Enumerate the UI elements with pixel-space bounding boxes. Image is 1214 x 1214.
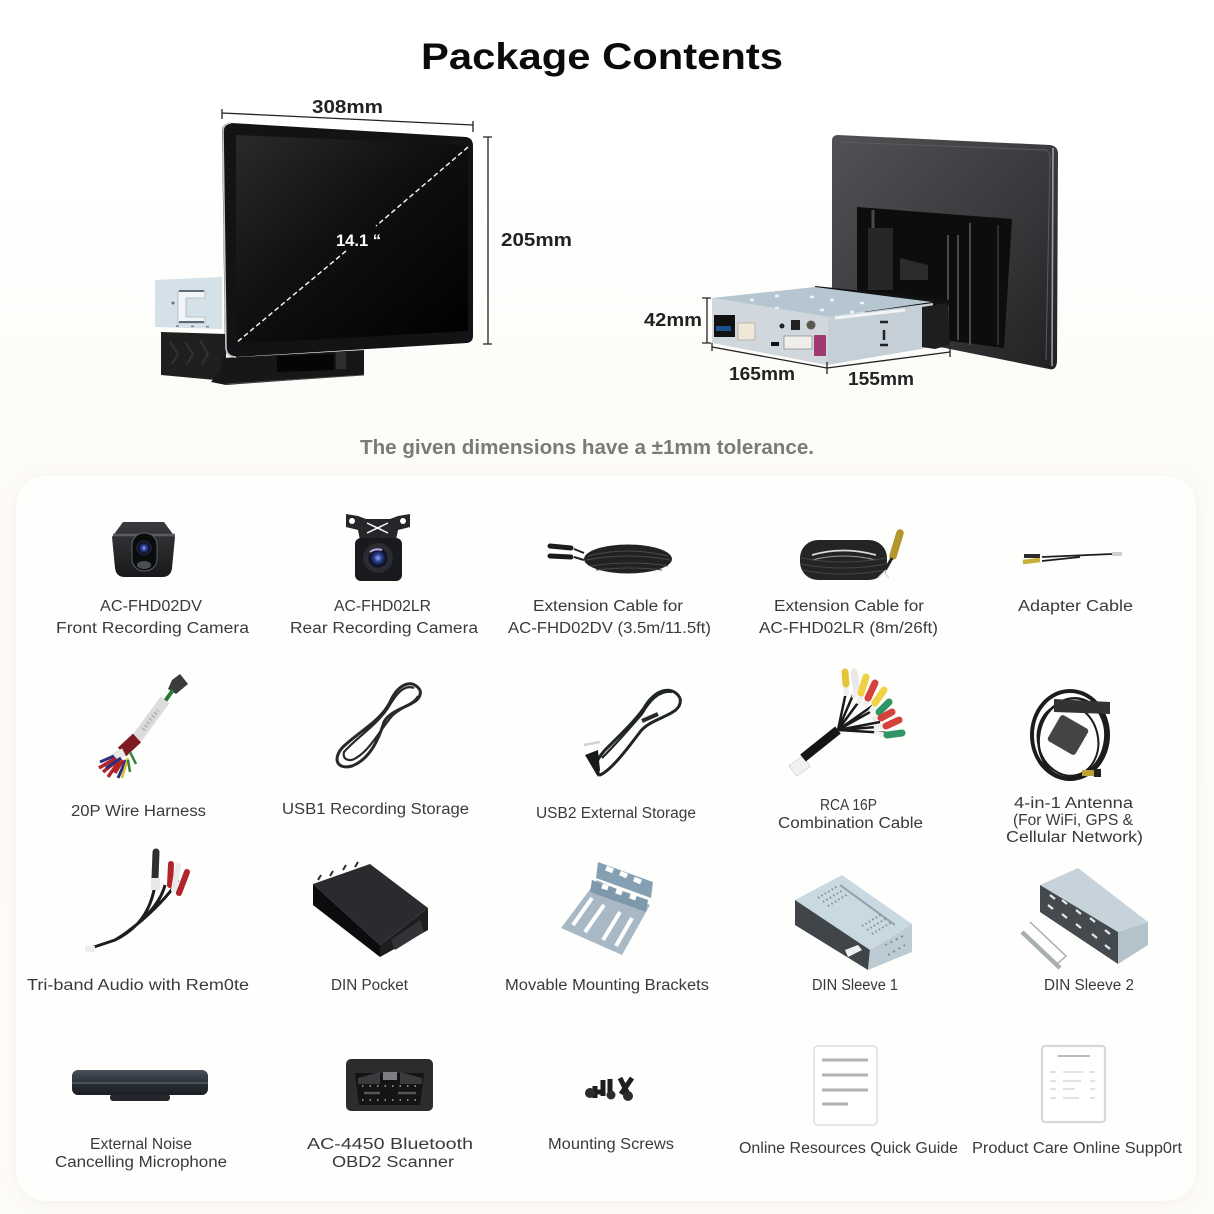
dimension: height 205mm [483,137,572,344]
item: USB2: USB2 External Storage [536,805,696,822]
title: Package Contents [421,36,783,77]
panel shadow [16,478,1196,1202]
dimension: width 308mm: 308mm [312,96,383,117]
icon: adapter cable [1023,552,1122,562]
item: adapter cable: Adapter Cable [1018,598,1133,615]
icon: microphone [72,1070,208,1101]
item: rear camera [290,514,478,637]
screen body [222,123,473,357]
icon: care card [1042,1046,1105,1122]
item: extension cable rear: Extension Cable for [774,598,924,615]
item: rear camera: Rear Recording Camera [290,620,478,637]
rear view of head unit [712,135,1058,369]
tolerance note: The given dimensions have a ±1mm tolerance. [360,437,814,459]
side bracket [922,303,950,349]
dimension: 165mm: 165mm [729,363,795,384]
item: extension cable rear [759,533,938,637]
screen size label: 14.1 “ [336,231,381,250]
item: microphone: External Noise [90,1136,192,1153]
screen edge highlight [223,123,236,357]
item: microphone: Cancelling Microphone [55,1154,227,1171]
item: antenna: Cellular Network) [1006,829,1143,846]
item: USB1: USB1 Recording Storage [282,801,469,818]
connectors [714,310,905,356]
icon: USB cable [337,684,420,767]
item: adapter cable [1018,552,1133,615]
icon: OBD2 scanner [346,1059,433,1111]
rear panel edge [1052,148,1053,366]
item: front camera: AC-FHD02DV [100,598,203,615]
item: front camera [56,522,249,637]
item: antenna: 4-in-1 Antenna [1014,795,1133,812]
panel: contents [16,476,1196,1201]
icon: cable coil [550,544,672,574]
icon: cable coil with yellow plug [800,533,900,580]
icon: RCA bundle [789,672,902,776]
icon: sleeve 2 [1022,868,1148,968]
item: front camera: Front Recording Camera [56,620,249,637]
item: screws: Mounting Screws [548,1136,674,1153]
item: tri-band audio [27,852,249,994]
item: tri-band audio: Tri-band Audio with Rem0te [27,977,249,994]
dimension: 165mm [712,343,827,384]
icon: audio cable [85,852,187,952]
item: DIN sleeve 1: DIN Sleeve 1 [812,977,898,994]
item: extension cable front [508,544,711,637]
icon: front camera [112,522,175,577]
metal box connector side [712,298,828,365]
item: DIN sleeve 2: DIN Sleeve 2 [1044,977,1134,994]
item: DIN sleeve 1 [795,875,912,994]
item: OBD2 scanner [307,1059,473,1171]
item: rear camera: AC-FHD02LR [334,598,431,615]
item: screws [548,1078,674,1153]
item: extension cable front: Extension Cable for [533,598,683,615]
item: DIN sleeve 2 [1022,868,1148,994]
item: extension cable rear: AC-FHD02LR (8m/26ft) [759,620,938,637]
metal box top [712,287,932,317]
item: extension cable front: AC-FHD02DV (3.5m/11.5ft) [508,620,711,637]
icon: screws [585,1078,633,1101]
item: online support: Product Care Online Supp0rt [972,1140,1183,1157]
icon: rear camera [346,514,410,581]
item: microphone [55,1070,227,1171]
front view of head unit [155,123,473,385]
dimension: 42mm height [644,298,711,343]
rear panel bevel [840,142,1050,360]
item: USB1 [282,684,469,818]
item: USB2 [536,690,696,822]
item: wire harness [71,674,206,820]
item: quick guide [739,1046,958,1157]
mounting bracket [815,207,1012,348]
item: mounting brackets: Movable Mounting Brackets [505,977,709,994]
item: OBD2 scanner: AC-4450 Bluetooth [307,1136,473,1153]
metal box right side [827,303,933,365]
icon: sleeve 1 [795,875,912,970]
icon: antenna [1030,691,1113,784]
item: antenna [1006,691,1143,846]
item: antenna: (For WiFi, GPS & [1013,812,1134,829]
dimension: 155mm: 155mm [848,368,914,389]
item: RCA cable: RCA 16P [820,797,877,814]
item: quick guide: Online Resources Quick Guide [739,1140,958,1157]
rear panel [832,135,1058,369]
icon: brackets [561,862,653,955]
item: wire harness: 20P Wire Harness [71,803,206,820]
metal chassis [155,277,222,329]
item: DIN pocket: DIN Pocket [331,977,409,994]
top face highlights [750,296,864,312]
item: RCA cable [778,672,923,832]
dimension: height 205mm: 205mm [501,229,572,250]
item: DIN pocket [313,862,428,994]
din pocket behind screen [161,332,364,385]
item: RCA cable: Combination Cable [778,815,923,832]
icon: wire harness [99,674,188,778]
dimension: 155mm [827,346,950,389]
item: OBD2 scanner: OBD2 Scanner [332,1154,454,1171]
item: mounting brackets [505,862,709,994]
display area [236,135,468,344]
icon: DIN pocket [313,862,428,957]
icon: document [814,1046,877,1125]
icon: USB cable with connector [584,690,680,777]
dimension: width 308mm [222,96,473,132]
screen diagonal [236,147,468,343]
dimension: 42mm height: 42mm [644,309,702,330]
item: online support [972,1046,1183,1157]
